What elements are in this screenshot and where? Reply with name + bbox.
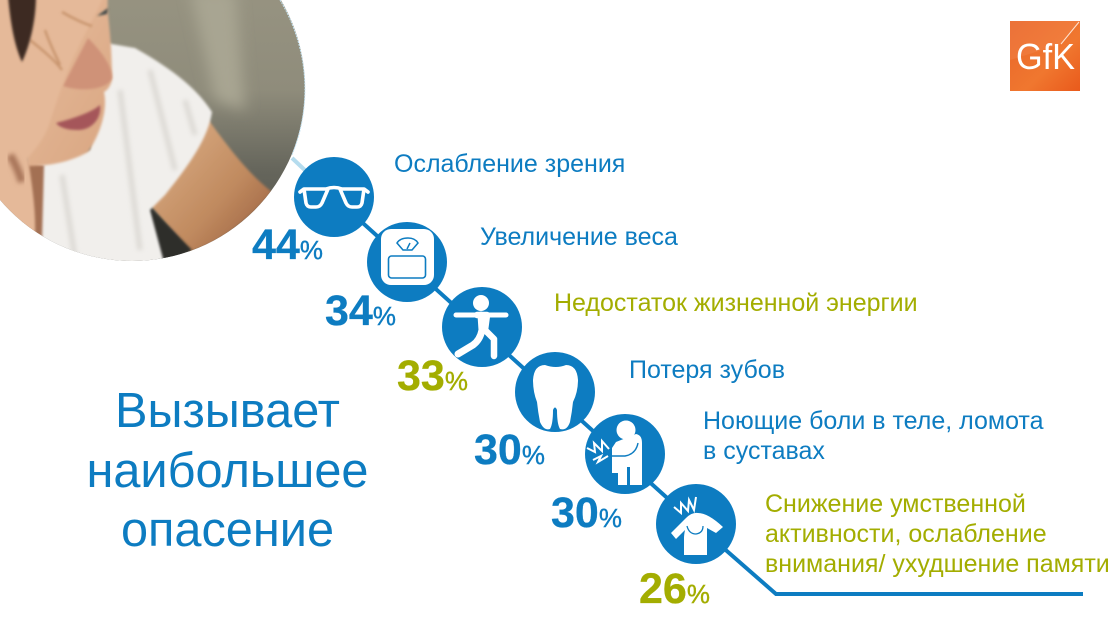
photo: white shirt: [30, 42, 212, 270]
value: 33%: 33%: [397, 352, 468, 400]
label: mental activity: Снижение умственной: [765, 490, 1026, 518]
photo: eyelash: [97, 8, 108, 16]
label: body aches: в суставах: [703, 437, 825, 465]
connector line: [334, 197, 1083, 594]
label: energy: Недостаток жизненной энергии: [554, 289, 918, 317]
photo: dark gap: [150, 208, 193, 259]
GfK logo: [1010, 21, 1080, 91]
label: body aches: Ноющие боли в теле, ломота: [703, 407, 1044, 435]
label: teeth: Потеря зубов: [629, 356, 785, 384]
icon: person with joint pain: [585, 414, 665, 494]
photo: lips: [56, 105, 100, 130]
label: weight: Увеличение веса: [480, 223, 678, 251]
photo: hand and wrist: [0, 0, 72, 232]
photo pale outline: [280, 0, 305, 155]
label: mental activity: [765, 490, 1110, 578]
photo: face: [27, 0, 114, 168]
connector line light segment: [292, 158, 310, 175]
value: 30% aches: 30%: [551, 489, 622, 537]
label: mental activity: внимания/ ухудшение памяти: [765, 550, 1110, 578]
value: 26%: 26%: [639, 565, 710, 613]
photo: neck shadow: [20, 160, 44, 240]
icon: glasses: [294, 157, 374, 237]
icon: person with headache: [656, 484, 736, 564]
value: 30% teeth: 30%: [474, 426, 545, 474]
label: body aches: [703, 407, 1044, 465]
icon: exercising figure: [442, 287, 522, 367]
photo: dark hair: [8, 0, 36, 62]
label: vision: Ослабление зрения: [394, 150, 625, 178]
heading: Вызывает наибольшее опасение: [86, 384, 369, 557]
GfK logo: GfK: [1016, 36, 1075, 77]
value: 34%: 34%: [325, 287, 396, 335]
label: mental activity: активности, ослабление: [765, 520, 1047, 548]
photo: nose: [63, 38, 112, 89]
photo: woman holding her head: [0, 0, 315, 270]
photo: arm: [150, 115, 272, 252]
icon: tooth: [515, 352, 595, 432]
icon: scale: [367, 222, 447, 302]
value: 44%: 44%: [252, 221, 323, 269]
